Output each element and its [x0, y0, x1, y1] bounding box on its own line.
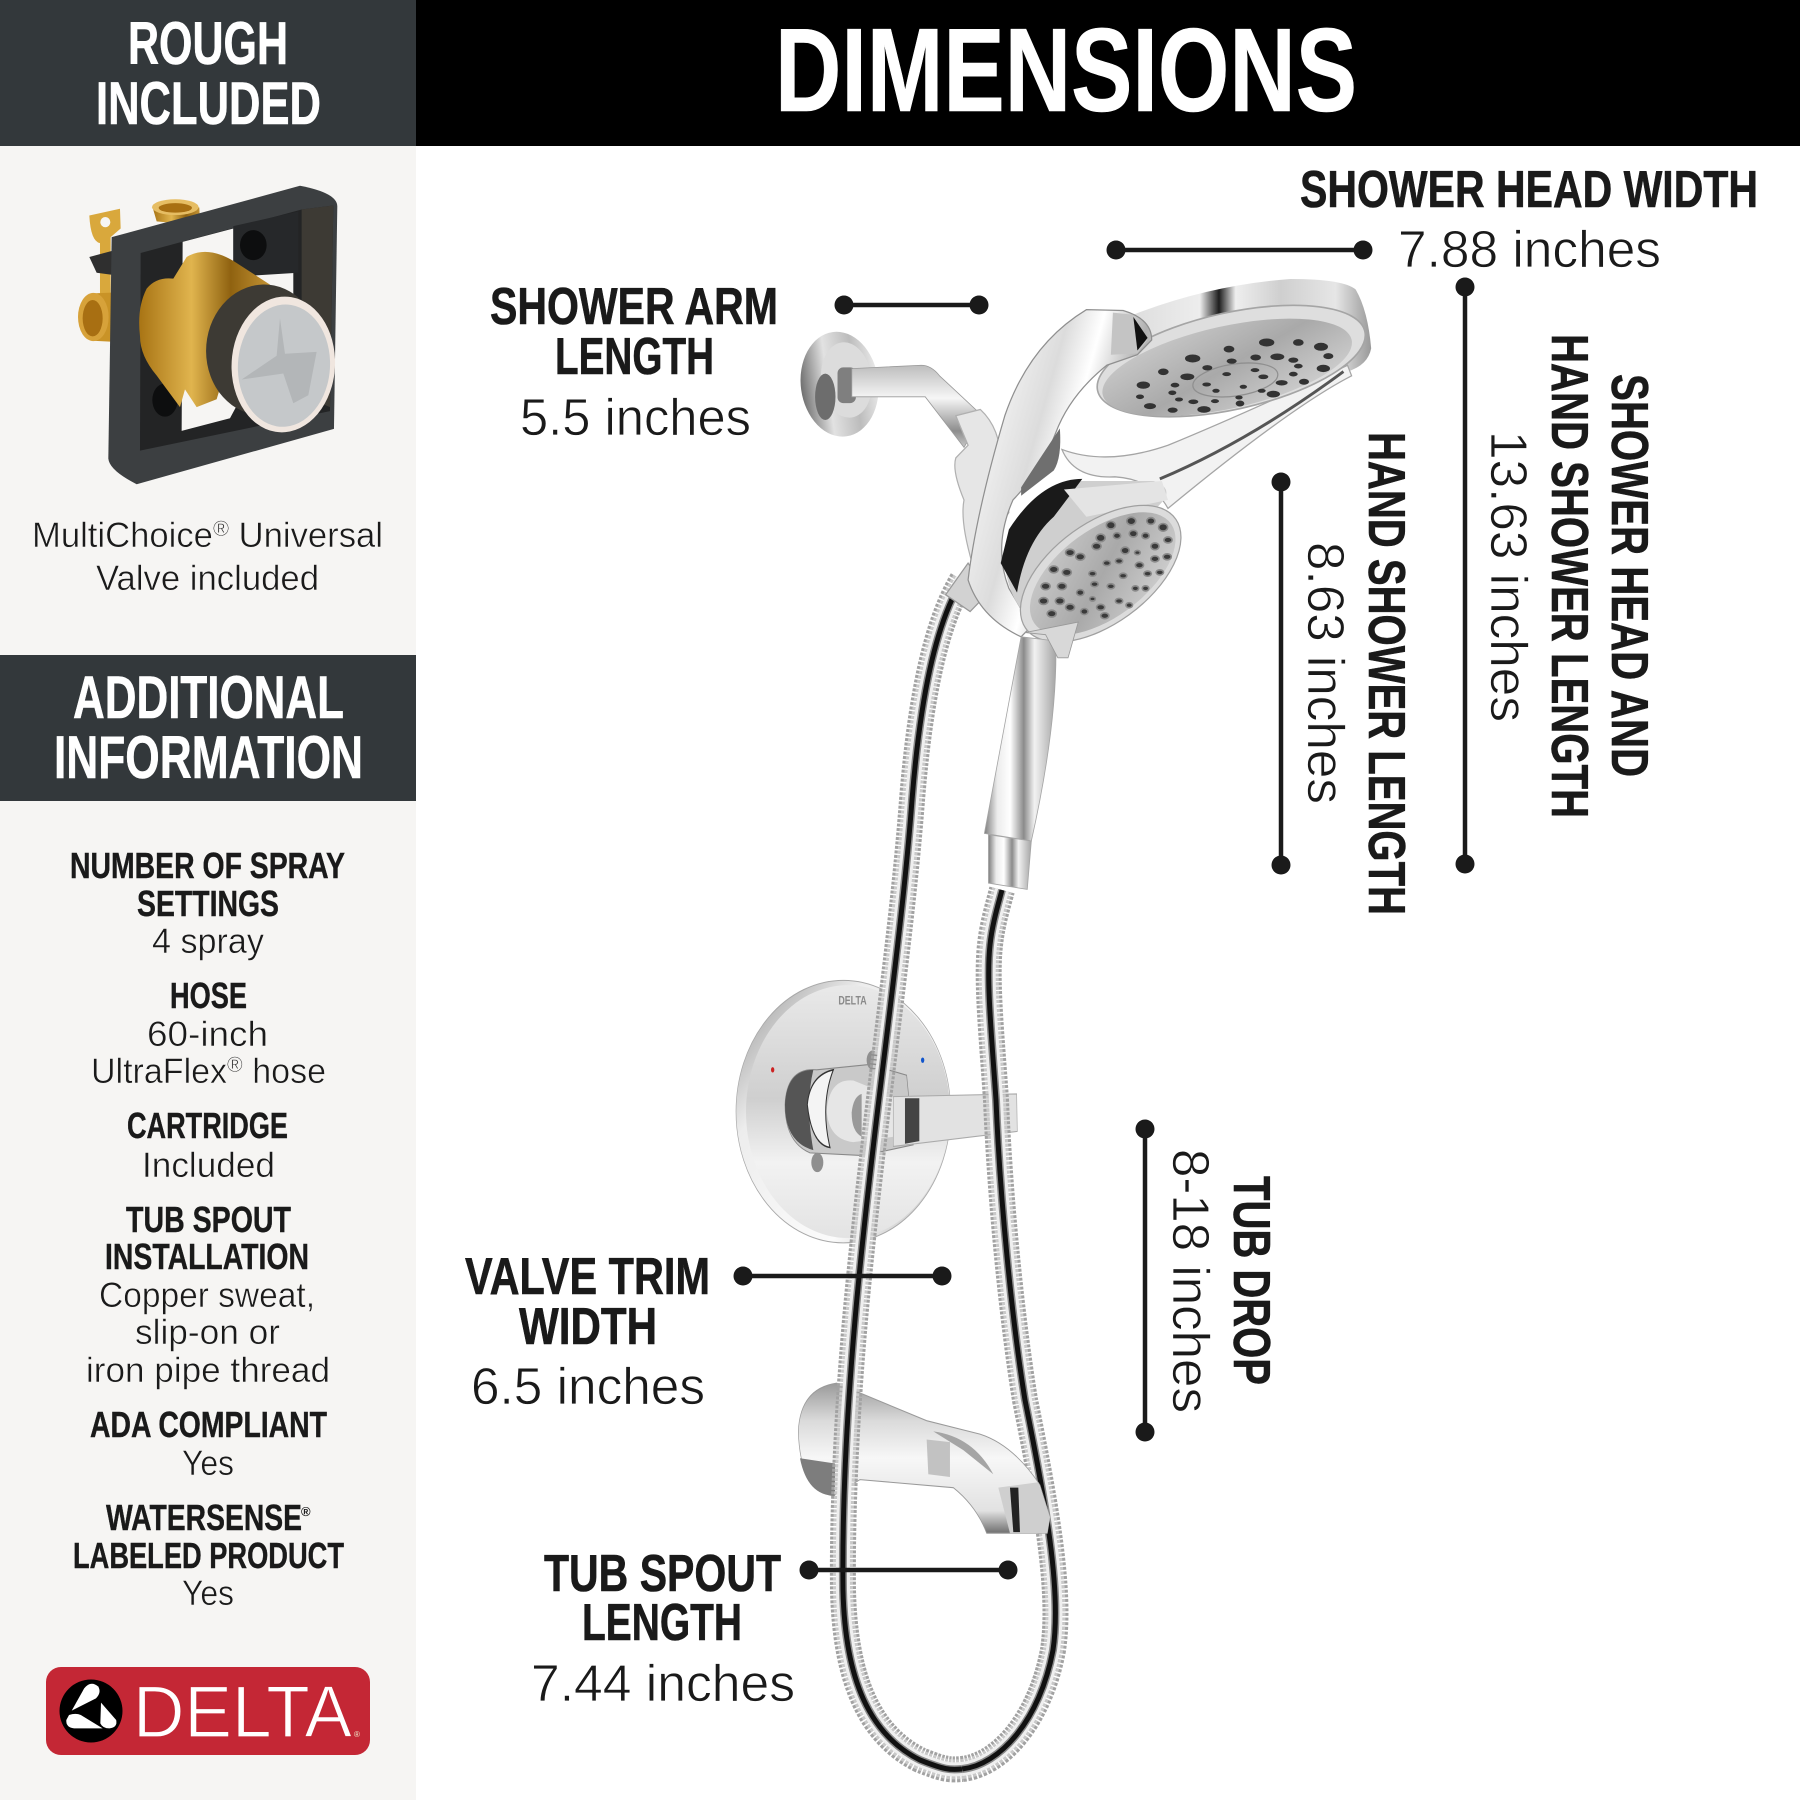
text: valve caption: ®: [213, 516, 229, 541]
heading: Additional Information: INFORMATION: [54, 724, 363, 791]
title bar: DIMENSIONS: [416, 0, 1800, 146]
text block: hose: hose: [243, 1052, 326, 1091]
holder arch: [968, 310, 1152, 637]
dimension line: combined length: [1456, 278, 1474, 874]
text block: WaterSense: WATERSENSE: [106, 1497, 302, 1538]
text block: hose: HOSE: [170, 975, 247, 1016]
label: combined length: [1479, 334, 1658, 818]
text: valve caption: MultiChoice: [32, 516, 215, 555]
label: hand shower length: HAND SHOWER LENGTH: [1357, 432, 1415, 915]
text block: spray settings: SETTINGS: [137, 883, 279, 924]
heading: Additional Information: [0, 655, 416, 801]
label: shower arm length: SHOWER ARM: [490, 278, 778, 336]
large head body and rim: [1062, 279, 1375, 508]
text block: tub spout installation: Copper sweat,: [99, 1276, 315, 1315]
logo: Delta: DELTA: [133, 1672, 352, 1753]
text block: cartridge: [127, 1105, 288, 1185]
label: hand shower length: [1296, 432, 1415, 915]
nozzles: large head: [1136, 338, 1333, 413]
text block: hose: 60-inch: [147, 1015, 268, 1054]
label: shower arm length: LENGTH: [555, 328, 714, 386]
heading: Rough Included: [0, 0, 416, 146]
label: shower arm length: [490, 278, 778, 447]
dimension line: tub drop: [1136, 1120, 1154, 1442]
label: tub drop: TUB DROP: [1222, 1176, 1280, 1385]
panel: left sidebar background: [0, 0, 416, 1800]
dimension line: shower arm: [834, 296, 988, 314]
icon: rough-in valve: [78, 186, 342, 484]
dimension line: hand shower length: [1272, 472, 1290, 874]
text block: spray settings: NUMBER OF SPRAY: [70, 845, 345, 886]
text block: tub spout installation: [86, 1199, 330, 1390]
text block: WaterSense: LABELED PRODUCT: [73, 1535, 344, 1576]
text: valve caption: [32, 516, 383, 598]
text block: spray settings: 4 spray: [152, 922, 264, 961]
hand shower handle: [984, 622, 1078, 889]
dimension line: valve trim: [734, 1266, 952, 1286]
hand shower body: [997, 478, 1204, 669]
label: valve trim width: 6.5 inches: [471, 1358, 705, 1416]
label: tub spout length: TUB SPOUT: [544, 1545, 781, 1603]
label: tub drop: [1161, 1149, 1280, 1413]
text block: tub spout installation: slip-on or: [135, 1313, 280, 1352]
label: tub spout length: LENGTH: [582, 1594, 742, 1652]
dimension line: shower head width: [1106, 240, 1372, 260]
label: tub spout length: 7.44 inches: [531, 1655, 795, 1713]
illustration: tub spout: [798, 1383, 1050, 1533]
wall flange and shower arm: [794, 327, 1009, 612]
label: shower head width: 7.88 inches: [1398, 221, 1661, 279]
label: valve trim width: VALVE TRIM: [465, 1248, 710, 1306]
illustration: hose left run: [843, 580, 962, 1769]
dimension line: tub spout: [800, 1560, 1018, 1580]
label: combined length: SHOWER HEAD AND: [1600, 374, 1658, 777]
illustration: hose right run: [962, 890, 1055, 1769]
text block: hose: ®: [227, 1052, 243, 1077]
text block: ADA compliant: ADA COMPLIANT: [90, 1404, 327, 1445]
label: hand shower length: 8.63 inches: [1296, 542, 1354, 804]
label: combined length: HAND SHOWER LENGTH: [1540, 334, 1598, 818]
text block: tub spout installation: INSTALLATION: [105, 1236, 309, 1277]
text block: WaterSense: ®: [301, 1504, 311, 1519]
nozzles: hand shower: [1039, 517, 1172, 619]
text block: ADA compliant: [90, 1404, 327, 1483]
logo: Delta: [46, 1667, 370, 1755]
illustration: shower assembly: [794, 279, 1375, 889]
title bar: DIMENSIONS: DIMENSIONS: [775, 4, 1357, 137]
text block: ADA compliant: Yes: [182, 1444, 234, 1483]
label: shower arm length: 5.5 inches: [520, 389, 751, 447]
heading: Rough Included: ROUGH: [128, 10, 288, 77]
text block: WaterSense: [73, 1497, 344, 1613]
label: valve trim width: WIDTH: [519, 1298, 657, 1356]
text block: tub spout installation: iron pipe thread: [86, 1351, 330, 1390]
text: valve caption: Valve included: [96, 559, 319, 598]
label: tub drop: 8-18 inches: [1161, 1149, 1219, 1413]
text block: cartridge: CARTRIDGE: [127, 1105, 288, 1146]
label: valve trim width: [465, 1248, 710, 1416]
heading: Additional Information: ADDITIONAL: [73, 664, 344, 731]
text block: tub spout installation: TUB SPOUT: [126, 1199, 291, 1240]
logo: Delta: ®: [354, 1730, 360, 1739]
label: combined length: 13.63 inches: [1479, 431, 1537, 722]
illustration: valve trim plate and handle: DELTA: [838, 995, 867, 1008]
label: tub spout length: [531, 1545, 795, 1713]
heading: Rough Included: INCLUDED: [96, 70, 321, 137]
illustration: valve trim plate and handle: [736, 980, 1017, 1243]
text block: hose: UltraFlex: [91, 1052, 231, 1091]
text block: hose: [91, 975, 326, 1091]
text block: cartridge: Included: [142, 1146, 275, 1185]
text block: spray settings: [70, 845, 345, 961]
label: shower head width: [1300, 161, 1758, 279]
text: valve caption: Universal: [229, 516, 383, 555]
text block: WaterSense: Yes: [182, 1574, 234, 1613]
